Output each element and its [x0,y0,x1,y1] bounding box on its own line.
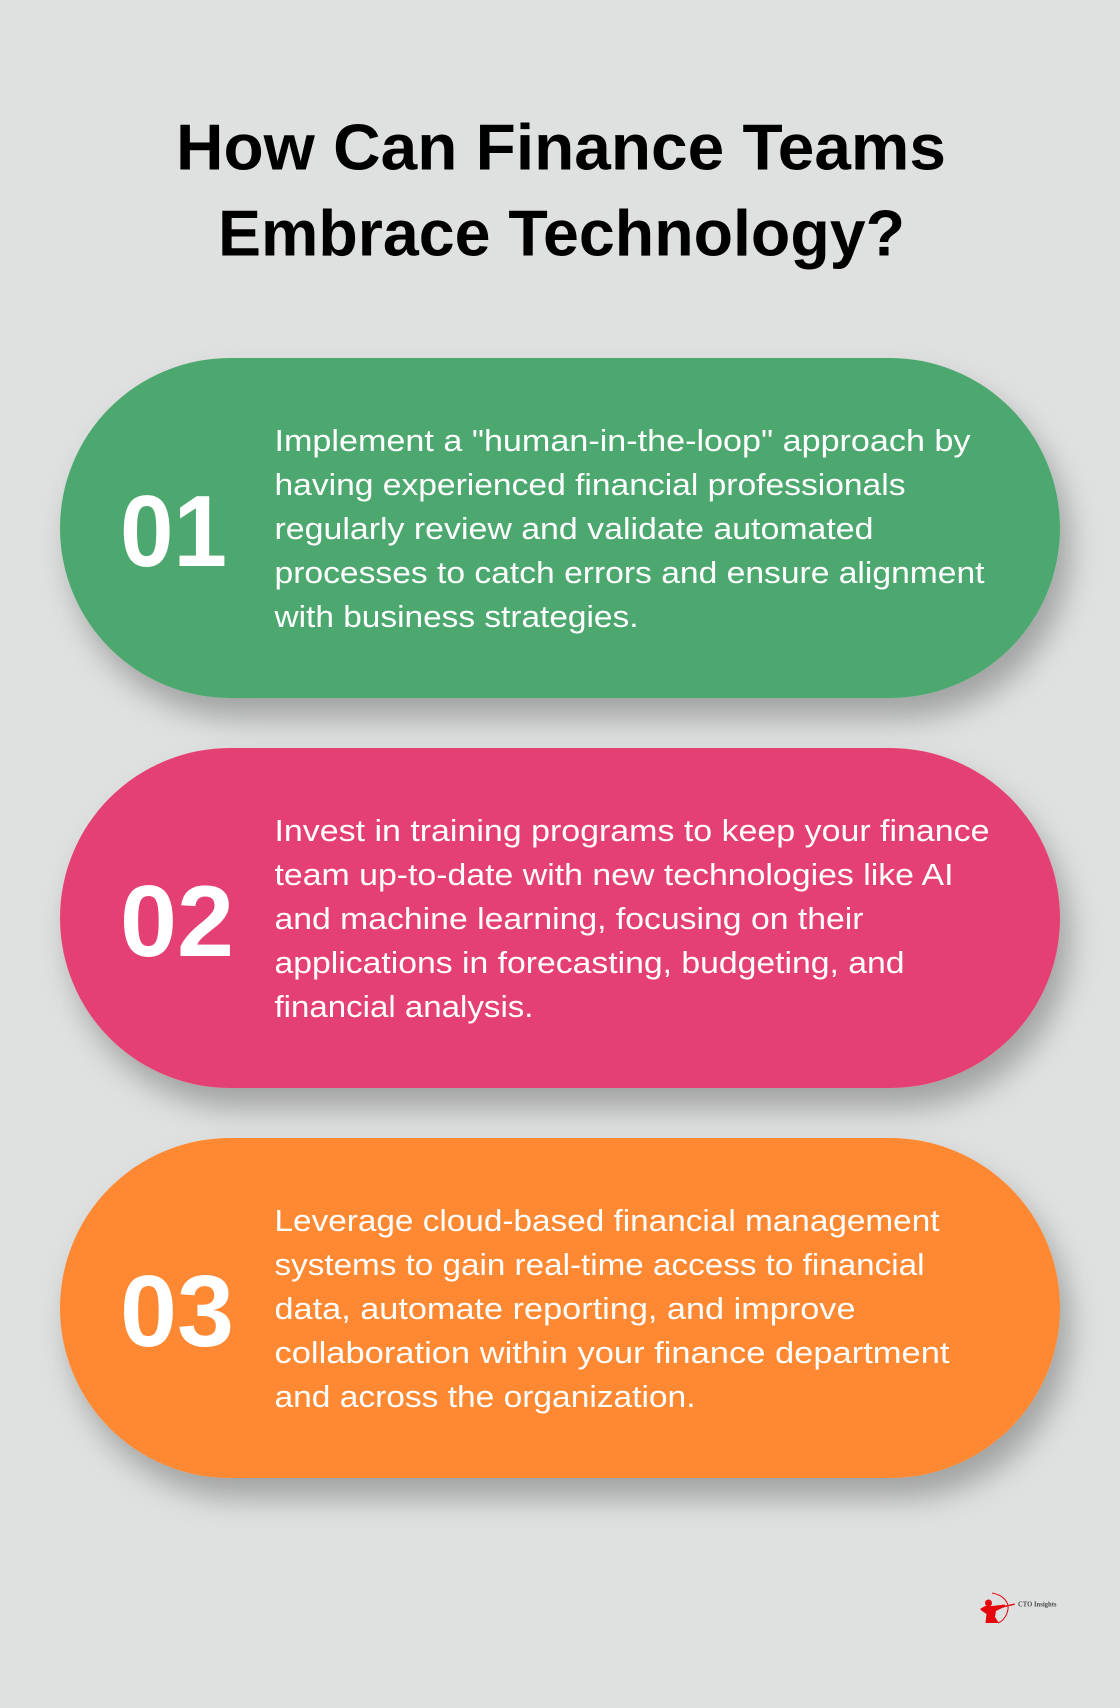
number 03: 03 [120,1256,234,1368]
text block: step 02: team up-to-date with new technologies like AI [274,857,954,892]
panel background: orange pill [60,1138,1060,1478]
text block: step 03: systems to gain real-time access to financial [274,1247,924,1282]
logo: CTO Insights [980,1593,1057,1623]
text block: step 01: processes to catch errors and ensure alignment [274,555,985,590]
text block: step 03 [274,1203,950,1414]
text block: step 01: having experienced financial professionals [274,467,906,502]
title [176,110,946,270]
panel: step 03 [60,1138,1060,1478]
text block: step 03: collaboration within your finance department [274,1335,950,1370]
text block: step 01: regularly review and validate automated [274,511,874,546]
number 02: 02 [120,866,234,978]
text block: step 03: data, automate reporting, and improve [274,1291,856,1326]
panel: step 01 [60,358,1060,698]
panel background: pink pill [60,748,1060,1088]
text block: step 02 [274,813,990,1024]
text block: step 02: Invest in training programs to keep your finance [274,813,990,848]
panel background: green pill [60,358,1060,698]
title: How Can Finance Teams [176,110,946,184]
panel: step 02 [60,748,1060,1088]
text block: step 02: financial analysis. [274,989,534,1024]
text block: step 03: Leverage cloud-based financial management [274,1203,940,1238]
text block: step 01: with business strategies. [273,599,638,634]
title: Embrace Technology? [218,196,905,270]
logo text: CTO Insights [1018,1600,1057,1608]
icon: red archer [980,1593,1016,1623]
text block: step 01 [273,423,985,634]
text block: step 01: Implement a "human-in-the-loop" approach by [274,423,971,458]
text block: step 03: and across the organization. [274,1379,696,1414]
text block: step 02: applications in forecasting, budgeting, and [274,945,905,980]
number 01: 01 [120,476,227,588]
text block: step 02: and machine learning, focusing on their [274,901,864,936]
